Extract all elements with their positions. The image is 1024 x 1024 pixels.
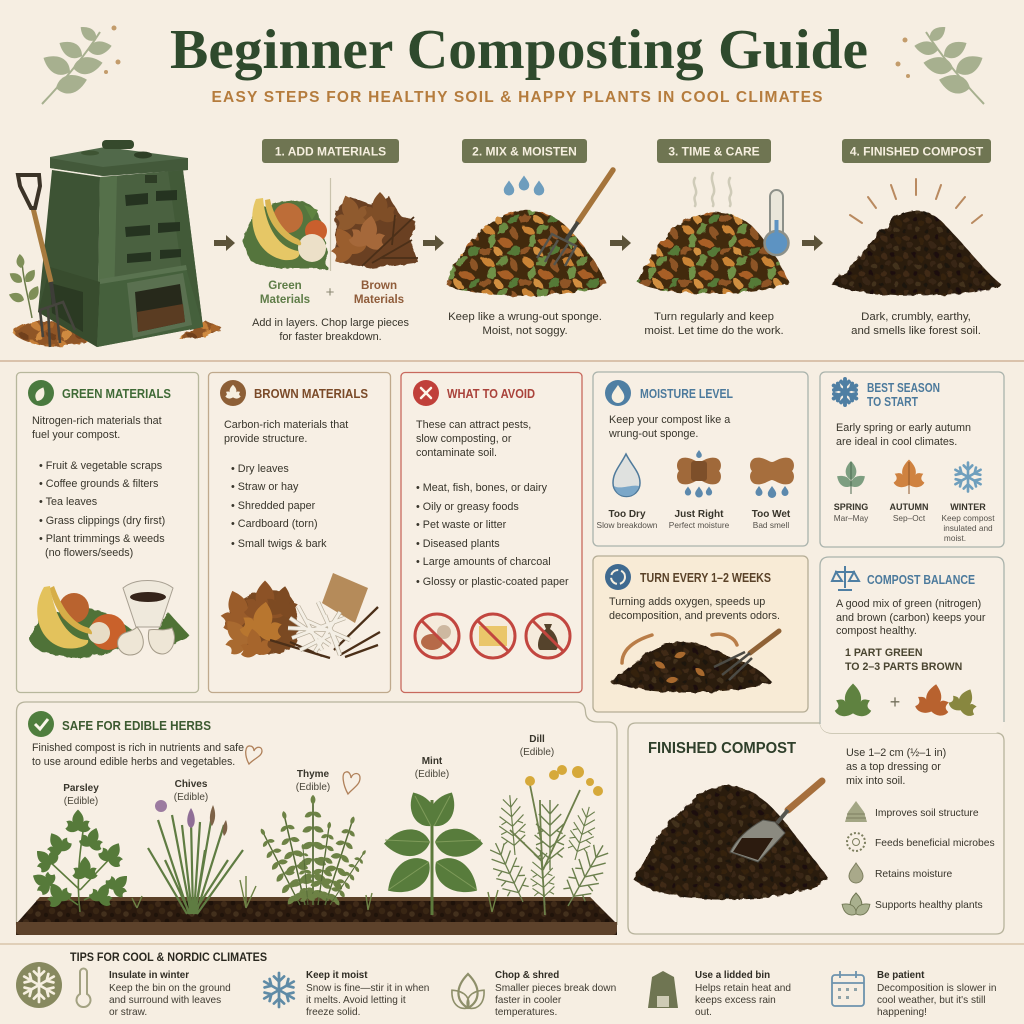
description: Dark, crumbly, earthy, <box>861 311 971 323</box>
tip: keep moist <box>264 970 429 1018</box>
divider <box>330 178 332 271</box>
list: • Dry leaves <box>231 463 289 475</box>
tip: be patient: Decomposition is slower in <box>877 983 996 994</box>
heading pill: 1. ADD MATERIALS <box>275 144 386 158</box>
plus: + <box>890 692 900 712</box>
heading: GREEN MATERIALS <box>62 387 171 401</box>
item: winter: WINTER <box>950 502 986 512</box>
heading pill: 4. FINISHED COMPOST <box>850 144 984 158</box>
tip: keep moist: Keep it moist <box>306 970 368 981</box>
arrow 3 <box>610 235 631 251</box>
intro text: are ideal in cool climates. <box>836 436 957 448</box>
icon: scales <box>832 566 859 590</box>
label: (Edible) <box>174 792 208 803</box>
tip: chop and shred: temperatures. <box>495 1007 557 1018</box>
intro text: mix into soil. <box>846 775 905 787</box>
heading: WHAT TO AVOID <box>447 387 535 401</box>
intro text: Nitrogen-rich materials that <box>32 415 162 427</box>
label <box>174 779 208 803</box>
item: autumn: Sep–Oct <box>893 513 926 523</box>
icon: steam <box>694 173 731 206</box>
tip: be patient <box>832 970 996 1018</box>
item: just right <box>669 450 730 530</box>
subtitle: EASY STEPS FOR HEALTHY SOIL & HAPPY PLANTS IN COOL CLIMATES <box>212 89 822 106</box>
vents <box>125 175 181 263</box>
description: Turn regularly and keep <box>654 311 774 323</box>
intro text: Carbon-rich materials that <box>224 419 348 431</box>
tip: lidded bin: out. <box>695 1007 712 1018</box>
icon: water drops <box>504 176 544 196</box>
description: for faster breakdown. <box>279 331 382 343</box>
item: too wet: Bad smell <box>753 520 789 530</box>
list: • Fruit & vegetable scraps <box>39 460 163 472</box>
benefit: moisture: Retains moisture <box>875 869 953 880</box>
panel: compost balance <box>820 557 1004 733</box>
intro text: wrung-out sponge. <box>608 428 698 440</box>
heading: MOISTURE LEVEL <box>640 387 733 401</box>
icon: no meat <box>415 614 459 658</box>
herb: dill <box>483 734 616 915</box>
item: too dry: Slow breakdown <box>597 520 658 530</box>
icon: leaf badge <box>220 380 246 406</box>
tip: keep moist: it melts. Avoid letting it <box>306 995 406 1006</box>
item: too dry: Too Dry <box>608 509 646 520</box>
brown materials pile <box>321 189 418 270</box>
illustration: brown scraps <box>213 573 380 663</box>
lid <box>50 140 188 176</box>
label: (Edible) <box>415 769 449 780</box>
panel: best season <box>820 372 1004 547</box>
item: spring <box>834 461 869 523</box>
item: autumn <box>890 460 928 523</box>
heading: COMPOST BALANCE <box>867 573 975 587</box>
label <box>415 756 449 780</box>
icon: snowflake badge <box>16 962 62 1008</box>
item: winter <box>941 462 995 543</box>
description: Keep like a wrung-out sponge. <box>448 311 602 323</box>
label: brown materials: Materials <box>354 293 404 306</box>
intro text: decomposition, and prevents odors. <box>609 610 780 622</box>
heading: BROWN MATERIALS <box>254 387 368 401</box>
grass tufts <box>132 876 498 912</box>
icon: snowflake <box>834 379 856 405</box>
heading pill: 3. TIME & CARE <box>668 144 760 158</box>
list: • Glossy or plastic-coated paper <box>416 576 569 588</box>
title: Beginner Composting Guide <box>170 19 868 81</box>
garden fork <box>537 170 613 266</box>
plant <box>7 254 42 318</box>
heading: FINISHED COMPOST <box>648 740 796 757</box>
icon: brown leaves <box>914 681 983 722</box>
herb: mint <box>380 756 485 915</box>
door <box>127 273 192 338</box>
tip: lidded bin: Use a lidded bin <box>695 970 770 981</box>
icon: cross badge <box>413 380 439 406</box>
list: • Cardboard (torn) <box>231 518 318 530</box>
intro text: compost healthy. <box>836 625 917 637</box>
compost pile <box>637 213 789 294</box>
icon: right leaf branch <box>896 23 986 104</box>
tip: lidded bin: Helps retain heat and <box>695 983 791 994</box>
intro text: fuel your compost. <box>32 429 120 441</box>
herb: parsley <box>27 783 135 912</box>
panel: brown materials <box>208 372 390 692</box>
benefit: moisture <box>849 863 953 883</box>
label <box>296 769 330 793</box>
compost bin illustration <box>7 140 222 347</box>
description: moist. Let time do the work. <box>644 325 784 337</box>
icon: no cheese <box>471 614 515 658</box>
heading pill <box>462 139 587 163</box>
heading pill: 2. MIX & MOISTEN <box>472 144 577 158</box>
heading: SAFE FOR EDIBLE HERBS <box>62 719 211 733</box>
heading pill <box>262 139 399 163</box>
illustration: green scraps <box>30 580 190 658</box>
list: • Diseased plants <box>416 538 500 550</box>
icon: heart <box>246 746 262 764</box>
thermometer <box>764 190 788 255</box>
tip: keep moist: freeze solid. <box>306 1007 360 1018</box>
description: Add in layers. Chop large pieces <box>252 317 409 329</box>
scoop <box>730 781 822 862</box>
list: • Straw or hay <box>231 481 299 493</box>
benefit: healthy plants <box>839 893 983 918</box>
heading pill <box>842 139 991 163</box>
illustration: turning pile <box>610 631 779 692</box>
tip: insulate: and surround with leaves <box>109 995 221 1006</box>
panel: moisture level <box>593 372 808 546</box>
intro text: as a top dressing or <box>846 761 941 773</box>
tip: keep moist: Snow is fine—stir it in when <box>306 983 429 994</box>
list: • Tea leaves <box>39 496 98 508</box>
list: • Plant trimmings & weeds <box>39 533 165 545</box>
icon: droplet badge <box>605 380 631 406</box>
arrow 4 <box>802 235 823 251</box>
list: (no flowers/seeds) <box>45 547 133 559</box>
label: Parsley <box>63 783 99 794</box>
icon: rotate badge <box>605 564 631 590</box>
list: • Small twigs & bark <box>231 538 327 550</box>
tip: insulate: or straw. <box>109 1007 147 1018</box>
label: Mint <box>422 756 443 767</box>
icon: green leaf <box>835 684 871 721</box>
heading: BEST SEASON <box>867 381 940 395</box>
list: • Oily or greasy foods <box>416 501 519 513</box>
ratio: 1 PART GREEN <box>845 647 923 659</box>
herb: thyme <box>251 769 373 910</box>
ratio: TO 2–3 PARTS BROWN <box>845 661 962 673</box>
label: Thyme <box>297 769 330 780</box>
icon: no pet waste <box>526 614 570 658</box>
item: spring: SPRING <box>834 502 868 512</box>
panel: finished compost <box>628 723 1004 934</box>
tip: chop and shred: faster in cooler <box>495 995 562 1006</box>
heading: TURN EVERY 1–2 WEEKS <box>640 571 771 585</box>
label: (Edible) <box>64 796 98 807</box>
spade fork <box>18 175 75 347</box>
label: (Edible) <box>520 747 554 758</box>
item: winter: Keep compost <box>941 513 995 523</box>
tip: insulate: Keep the bin on the ground <box>109 983 231 994</box>
item: winter: moist. <box>944 533 966 543</box>
tip: insulate: Insulate in winter <box>109 970 189 981</box>
arrow 2 <box>423 235 444 251</box>
intro text: Finished compost is rich in nutrients and safe <box>32 742 244 754</box>
icon: left leaf branch <box>40 23 120 104</box>
label <box>63 783 99 807</box>
item: too wet <box>750 458 794 530</box>
garden bed <box>16 897 617 935</box>
label: Dill <box>529 734 545 745</box>
intro text: Early spring or early autumn <box>836 422 971 434</box>
label <box>520 734 554 758</box>
mixed compost pile <box>446 210 607 296</box>
intro text: Turning adds oxygen, speeds up <box>609 596 765 608</box>
leaf litter <box>12 320 222 346</box>
description: and smells like forest soil. <box>851 325 981 337</box>
intro text: A good mix of green (nitrogen) <box>836 598 981 610</box>
tip: insulate <box>76 968 231 1018</box>
tip: chop and shred <box>447 970 616 1018</box>
icon: heart large <box>343 772 360 794</box>
intro text: contaminate soil. <box>416 447 497 459</box>
item: spring: Mar–May <box>834 513 869 523</box>
benefit: microbes <box>847 833 995 851</box>
herb: chives <box>148 779 243 914</box>
green materials pile <box>243 198 327 269</box>
heading pill <box>657 139 771 163</box>
list: • Large amounts of charcoal <box>416 556 551 568</box>
item: just right: Just Right <box>675 509 724 520</box>
tip: be patient: cool weather, but it's still <box>877 995 986 1006</box>
intro text: Use 1–2 cm (½–1 in) <box>846 747 946 759</box>
intro text: provide structure. <box>224 433 307 445</box>
benefit: microbes: Feeds beneficial microbes <box>875 838 995 849</box>
tips section <box>16 950 996 1018</box>
panel: turn every 1-2 weeks <box>593 556 808 712</box>
icon: leaf badge <box>28 380 54 406</box>
label: Chives <box>175 779 208 790</box>
tip: chop and shred: Chop & shred <box>495 970 559 981</box>
item: winter: insulated and <box>943 523 993 533</box>
step 2: mix and moisten <box>446 139 613 337</box>
label: green materials: Green <box>268 279 302 292</box>
icon: check badge <box>28 711 54 737</box>
item: just right: Perfect moisture <box>669 520 730 530</box>
intro text: to use around edible herbs and vegetables. <box>32 756 235 768</box>
tip: chop and shred: Smaller pieces break down <box>495 983 616 994</box>
step 1: add materials <box>243 139 418 343</box>
list: • Shredded paper <box>231 500 316 512</box>
list: • Pet waste or litter <box>416 519 507 531</box>
benefit: healthy plants: Supports healthy plants <box>875 900 983 911</box>
heading: TIPS FOR COOL & NORDIC CLIMATES <box>70 950 267 964</box>
panel: what to avoid <box>401 372 582 692</box>
list: • Meat, fish, bones, or dairy <box>416 482 548 494</box>
finished compost pile <box>831 211 1002 295</box>
intro text: These can attract pests, <box>416 419 531 431</box>
compost pile <box>634 785 828 900</box>
icon: sun rays <box>850 179 982 223</box>
heading: TO START <box>867 395 918 409</box>
item: autumn: AUTUMN <box>890 502 928 512</box>
description: Moist, not soggy. <box>482 325 568 337</box>
label: green materials: Materials <box>260 293 310 306</box>
step 3: time and care <box>637 139 789 337</box>
item: too wet: Too Wet <box>752 509 791 520</box>
intro text: and brown (carbon) keeps your <box>836 612 986 624</box>
list: • Grass clippings (dry first) <box>39 515 165 527</box>
list: • Coffee grounds & filters <box>39 478 159 490</box>
panel: green materials <box>16 372 198 692</box>
plus: + <box>326 284 335 301</box>
arrow 1 <box>214 235 235 251</box>
tip: lidded bin: keeps excess rain <box>695 995 776 1006</box>
label: (Edible) <box>296 782 330 793</box>
tip: be patient: Be patient <box>877 970 925 981</box>
item: too dry <box>597 454 658 530</box>
benefit: soil structure: Improves soil structure <box>875 808 979 819</box>
tip: be patient: happening! <box>877 1007 927 1018</box>
benefit: soil structure <box>845 801 979 822</box>
intro text: Keep your compost like a <box>609 414 730 426</box>
step 4: finished compost <box>831 139 1002 337</box>
intro text: slow composting, or <box>416 433 512 445</box>
label: brown materials: Brown <box>361 279 397 292</box>
panel: herbs <box>16 702 617 935</box>
tip: lidded bin <box>648 970 791 1018</box>
